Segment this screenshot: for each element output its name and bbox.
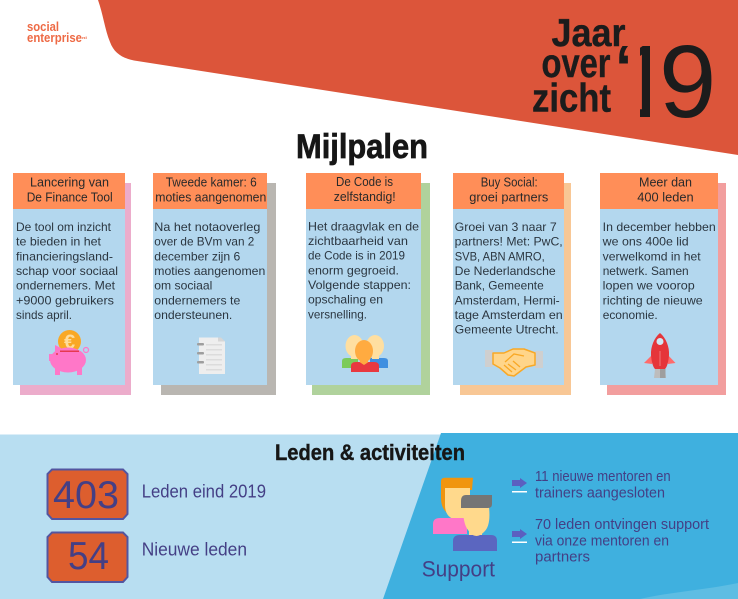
card text: over de BVm van 2: [154, 235, 255, 249]
card heading: [469, 176, 548, 204]
card text: [16, 220, 118, 322]
card heading: Tweede kamer: 6: [166, 176, 257, 190]
text: support: partners: [535, 550, 590, 566]
panel: Buy Social: [453, 173, 571, 395]
card text: moties aangenomen: [154, 264, 265, 278]
text: mentoren: [535, 469, 671, 502]
text: support: 70 leden ontvingen support: [535, 517, 709, 533]
card text: [308, 220, 419, 321]
text: mentoren: trainers aangesloten: [535, 486, 665, 502]
icon: document: [197, 338, 225, 374]
stat: 54 nieuwe leden: [48, 532, 247, 582]
card text: we ons 400e lid: [602, 235, 689, 249]
stat: 403 leden: [48, 470, 266, 519]
logo: nl: [82, 35, 87, 40]
card text: verwelkomd in het: [603, 249, 701, 263]
card text: SVB, ABN AMRO,: [455, 249, 545, 263]
card text: tage Amsterdam en: [455, 308, 563, 322]
icon: rocket: [644, 333, 676, 378]
card text: sinds april.: [16, 308, 72, 322]
card heading: De Finance Tool: [27, 190, 113, 204]
label: Support: Support: [422, 557, 495, 582]
card text: +9000 gebruikers: [16, 293, 114, 307]
icon: team: [342, 335, 388, 372]
card heading: Meer dan: [639, 176, 692, 190]
card text: Amsterdam, Hermi-: [455, 293, 560, 307]
panel: De Finance Tool: [13, 173, 131, 395]
logo: social: [27, 20, 59, 34]
panel: Leden & activiteiten: [0, 433, 738, 599]
card text: Bank, Gemeente: [455, 279, 544, 293]
heading: Mijlpalen: Mijlpalen: [296, 128, 428, 166]
report title: zicht: [532, 76, 611, 120]
card text: de Code is in 2019: [308, 249, 405, 263]
card text: partners! Met: PwC,: [455, 235, 563, 249]
card text: Na het notaoverleg: [154, 220, 260, 234]
logo: [27, 20, 87, 45]
card text: richting de nieuwe: [603, 293, 703, 307]
card text: economie.: [603, 308, 658, 322]
card text: Volgende stappen:: [308, 278, 411, 292]
text: mentoren: 11 nieuwe mentoren en: [535, 469, 671, 485]
card text: enorm gegroeid.: [308, 263, 399, 277]
card text: lopen we voorop: [603, 279, 695, 293]
card text: [602, 220, 716, 322]
report title: Jaar: [552, 12, 626, 55]
card text: netwerk. Samen: [603, 264, 689, 278]
icon: piggy bank: €: [64, 332, 75, 354]
card text: De Nederlandsche: [455, 264, 556, 278]
icon: support people: [433, 478, 497, 551]
report title: 1: [616, 24, 673, 139]
card text: In december hebben: [603, 220, 716, 234]
card text: Gemeente Utrecht.: [455, 323, 559, 337]
card text: ondersteunen.: [154, 308, 232, 322]
heading: Leden & activiteiten: Leden & activiteiten: [275, 440, 465, 465]
card text: ondernemers. Met: [16, 279, 116, 293]
card heading: 400 leden: [637, 190, 694, 204]
card heading: zelfstandig!: [334, 190, 396, 204]
text: support: via onze mentoren en: [535, 534, 669, 550]
report title: 9: [659, 24, 716, 139]
card heading: De Code is: [336, 175, 393, 189]
card heading: moties aangenomen: [155, 190, 266, 204]
report title: ‘: [615, 34, 632, 103]
card text: De tool om inzicht: [16, 220, 112, 234]
card text: te bieden in het: [16, 235, 102, 249]
card text: Het draagvlak en de: [308, 220, 419, 234]
panel: De Code: [306, 173, 430, 395]
logo: enterprise: [27, 31, 82, 45]
stat: 54 nieuwe leden: Nieuwe leden: [142, 540, 247, 560]
card text: ondernemers te: [154, 293, 241, 307]
card heading: [334, 175, 396, 204]
card heading: [155, 176, 266, 204]
card text: schap voor sociaal: [16, 264, 118, 278]
panel: 400 leden: [600, 173, 726, 395]
card heading: [637, 176, 694, 204]
report title: [533, 18, 712, 118]
card heading: Lancering van: [30, 176, 109, 190]
stat: 403 leden: Leden eind 2019: [142, 482, 266, 502]
card text: om sociaal: [154, 279, 212, 293]
card text: zichtbaarheid van: [308, 234, 408, 248]
arrow: support: [512, 529, 527, 543]
card heading: groei partners: [469, 190, 548, 204]
card text: [154, 220, 265, 322]
panel: Tweede kamer: [153, 173, 276, 395]
card text: versnelling.: [308, 307, 367, 321]
card text: financieringsland-: [16, 249, 113, 263]
icon: handshake: [485, 349, 543, 376]
icon: piggy bank: [49, 330, 88, 375]
stat: 403 leden: 403: [53, 474, 119, 517]
stat: 54 nieuwe leden: 54: [68, 535, 109, 578]
card text: [455, 220, 563, 337]
text: support: [535, 517, 709, 566]
card heading: Buy Social:: [481, 176, 538, 190]
header banner: [98, 0, 738, 155]
card text: december zijn 6: [154, 249, 241, 263]
report title: over: [542, 40, 611, 86]
card text: Groei van 3 naar 7: [455, 220, 557, 234]
card text: opschaling en: [308, 293, 383, 307]
card heading: [27, 176, 113, 204]
arrow: mentoren: [512, 478, 527, 492]
